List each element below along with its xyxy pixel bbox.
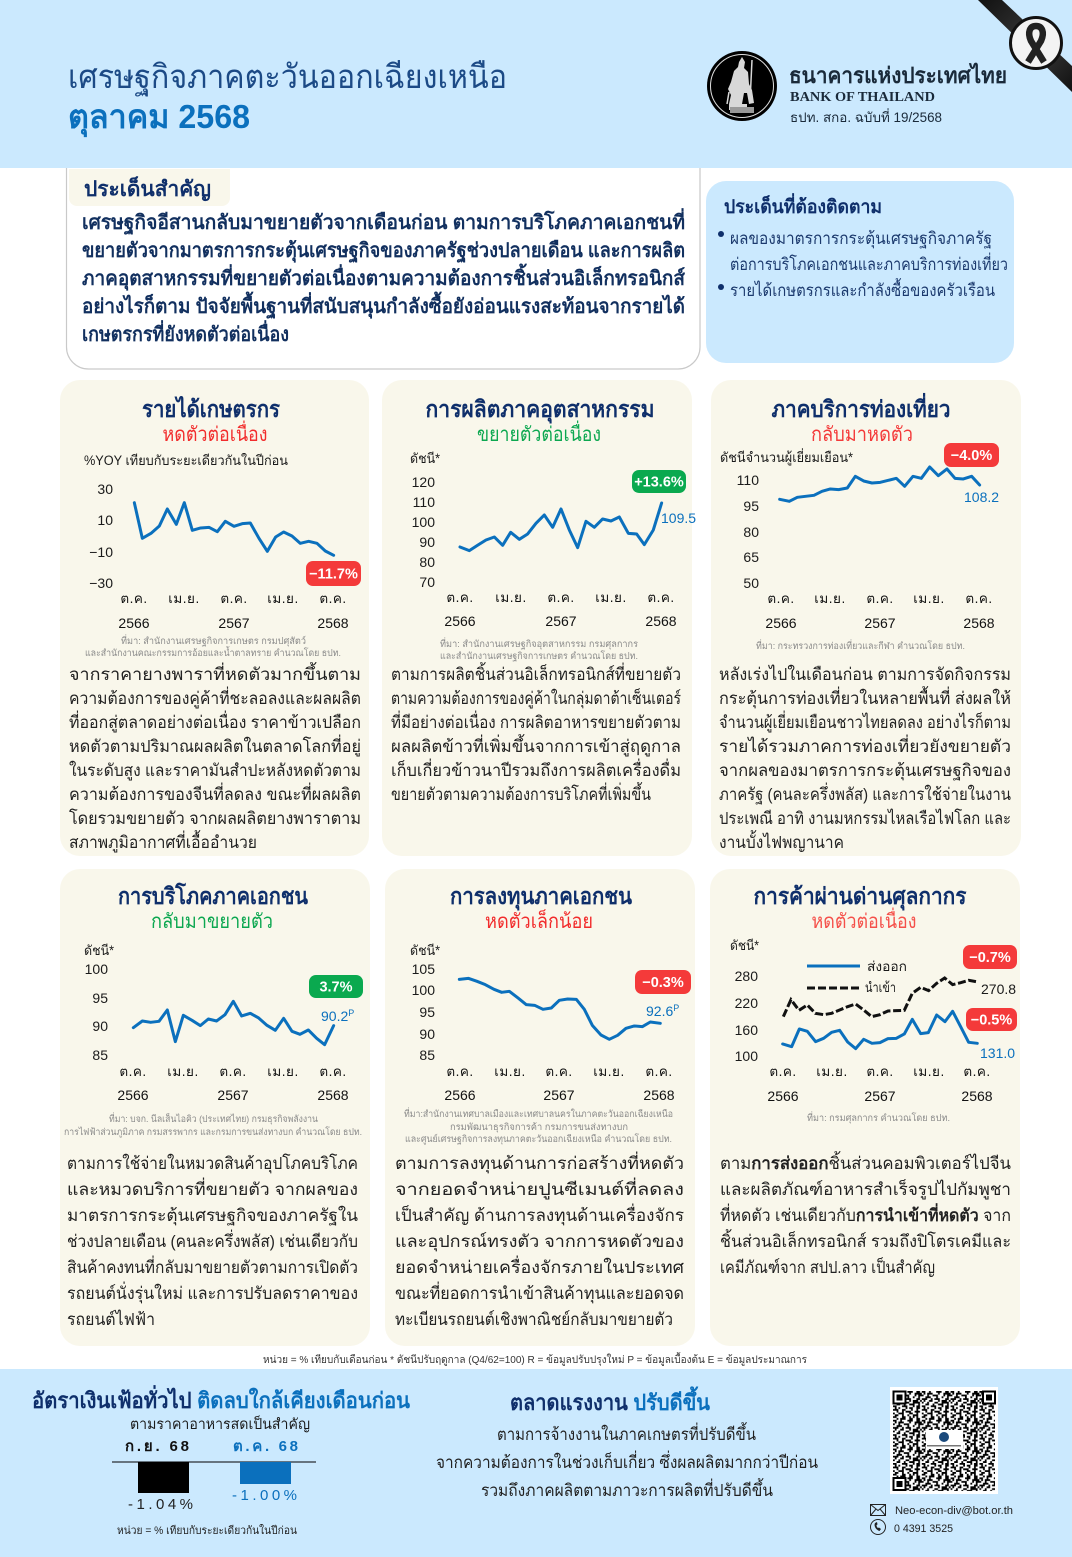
heading: กลับมาหดตัว	[811, 424, 913, 446]
heading: labour market: ตลาดแรงงาน ปรับดีขึ้น	[510, 1386, 710, 1415]
line chart: tourism: ต.ค.	[767, 591, 795, 606]
labour market text: ตามการจ้างงานในภาคเกษตรที่ปรับดีขึ้น	[497, 1422, 756, 1444]
source: ที่มา: กระทรวงการท่องเที่ยวและกีฬา คำนวณโดย ธปท.	[756, 639, 965, 652]
body text: ภาครัฐ (คนละครึ่งพลัส) และการใช้จ่ายในงาน	[719, 782, 1011, 805]
body text: ที่ออกสู่ตลาดอย่างต่อเนื่อง ราคาข้าวเปลือก	[69, 710, 361, 733]
body text	[67, 1153, 358, 1329]
legend: ส่งออก	[867, 959, 907, 974]
panel: tourism services	[711, 380, 1021, 856]
key points text: อย่างไรก็ตาม ปัจจัยพื้นฐานที่สนับสนุนกำลังซื้อยังอ่อนแรงสะท้อนจากรายได้	[82, 291, 685, 320]
body text: ขณะที่ยอดการนำเข้าสินค้าทุนและยอดจด	[395, 1281, 684, 1304]
icon: mourning ribbon	[978, 0, 1072, 92]
body text: รถยนต์ไฟฟ้า	[67, 1309, 155, 1329]
body text: ทะเบียนรถยนต์เชิงพาณิชย์กลับมาขยายตัว	[395, 1310, 673, 1329]
line chart: tourism: ต.ค.	[965, 591, 993, 606]
body text: ที่มีอย่างต่อเนื่อง การผลิตอาหารขยายตัวตาม	[391, 710, 681, 732]
line chart: private consumption: ต.ค.	[319, 1064, 347, 1079]
contact: phone	[870, 1520, 953, 1535]
line chart: private consumption: 2566	[117, 1087, 149, 1103]
line chart: customs trade: 2567	[864, 1088, 896, 1104]
body text: และหมวดบริการที่ขยายตัว จากผลของ	[67, 1177, 358, 1199]
line chart: private consumption: 2568	[317, 1087, 349, 1103]
footer band	[0, 1369, 1072, 1557]
panel: private investment	[385, 869, 695, 1346]
body text: หลังเร่งไปในเดือนก่อน ตามการจัดกิจกรรม	[719, 664, 1011, 684]
heading: things to watch: ประเด็นที่ต้องติดตาม	[724, 193, 882, 218]
badge	[632, 470, 686, 493]
heading: การลงทุนภาคเอกชน	[450, 883, 632, 911]
line chart: tourism: 65	[743, 549, 759, 565]
line chart: private investment: ต.ค.	[545, 1064, 573, 1079]
key points text: ขยายตัวจากมาตรการกระตุ้นเศรษฐกิจของภาครัฐช่วงปลายเดือน และการผลิต	[82, 239, 685, 264]
line chart: farm income: เม.ย.	[168, 591, 200, 606]
body text: และอุปกรณ์ทรงตัว จากการหดตัวของ	[395, 1232, 684, 1252]
line chart: industrial production: ต.ค.	[446, 590, 474, 605]
heading	[450, 883, 632, 933]
labour market text: จากความต้องการในช่วงเก็บเกี่ยว ซึ่งผลผลิตมากกว่าปีก่อน	[436, 1450, 818, 1472]
line chart: private consumption: ต.ค.	[119, 1064, 147, 1079]
heading: การผลิตภาคอุตสาหกรรม	[426, 396, 654, 424]
panel: industrial production	[382, 380, 696, 856]
QR code	[890, 1387, 998, 1494]
body text: ในระดับสูง และราคามันสำปะหลังหดตัวตาม	[69, 760, 361, 781]
source	[440, 637, 638, 662]
body text: ตามการผลิตชิ้นส่วนอิเล็กทรอนิกส์ที่ขยายตัว	[391, 662, 681, 684]
body text: โดยรวมขยายตัว จากผลผลิตยางพาราตาม	[69, 808, 361, 828]
line chart: private consumption	[84, 943, 363, 1103]
heading	[142, 395, 281, 446]
line chart: tourism	[720, 443, 999, 631]
badge: imports	[963, 945, 1017, 969]
legend	[807, 959, 907, 995]
line chart: private consumption: ดัชนี*	[84, 943, 115, 958]
line chart: industrial production: ดัชนี*	[410, 451, 441, 466]
body text: รายได้รวมภาคการท่องเที่ยวยังขยายตัว	[719, 734, 1011, 756]
line chart: industrial production: ต.ค.	[547, 590, 575, 605]
line chart: customs trade: ต.ค.	[866, 1064, 894, 1079]
line chart: customs trade: 2568	[961, 1088, 993, 1104]
bar chart: inflation: ต.ค. 68	[233, 1438, 298, 1455]
line chart: farm income	[84, 452, 361, 631]
body text	[395, 1151, 684, 1329]
line chart: private investment: 2566	[444, 1087, 476, 1103]
value: exports: 131.0	[980, 1045, 1015, 1061]
source: ที่มา: สำนักงานเศรษฐกิจการเกษตร กรมปศุสัตว์	[121, 634, 306, 647]
key points text: เกษตรกรที่ยังหดตัวต่อเนื่อง	[82, 319, 289, 346]
bar chart: inflation	[112, 1438, 316, 1513]
line chart: private investment: 85	[419, 1047, 435, 1063]
contact: phone: 0 4391 3525	[894, 1523, 953, 1535]
line chart: industrial production: 120	[412, 474, 435, 490]
body text	[391, 662, 681, 804]
line chart: private consumption: 85	[92, 1047, 108, 1063]
source: การไฟฟ้าส่วนภูมิภาค กรมสรรพากร และกรมการขนส่งทางบก คำนวณโดย ธปท.	[64, 1126, 362, 1138]
value: 109.5	[661, 510, 696, 526]
line chart: private consumption: 95	[92, 990, 108, 1006]
bank name: ธปท. สกอ. ฉบับที่ 19/2568	[790, 108, 942, 125]
watch list: ผลของมาตรการกระตุ้นเศรษฐกิจภาครัฐ	[730, 229, 992, 249]
body text: จากยอดจำหน่ายปูนซีเมนต์ที่ลดลง	[395, 1177, 684, 1200]
badge	[309, 975, 363, 998]
line chart: private investment: เม.ย.	[593, 1064, 625, 1079]
heading	[772, 392, 950, 446]
body text: และผลิตภัณฑ์อาหารสำเร็จรูปไปกัมพูชา	[720, 1178, 1011, 1200]
panel: farm income	[60, 380, 369, 856]
line chart: private investment: 95	[419, 1004, 435, 1020]
line chart: private consumption: เม.ย.	[167, 1064, 199, 1079]
body text: จากราคายางพาราที่หดตัวมากขึ้นตาม	[69, 662, 361, 684]
line chart: industrial production: 2567	[545, 613, 577, 629]
line chart: private investment	[410, 943, 691, 1103]
badge: +13.6%	[634, 474, 684, 490]
line chart: industrial production: ต.ค.	[647, 590, 675, 605]
legend: นำเข้า	[865, 980, 896, 995]
badge: imports: −0.7%	[969, 950, 1011, 966]
title: ตุลาคม 2568	[68, 98, 250, 138]
source: ที่มา: กรมศุลกากร คำนวณโดย ธปท.	[807, 1111, 950, 1124]
line chart: tourism: เม.ย.	[913, 591, 945, 606]
panel: inflation	[32, 1384, 410, 1537]
body text: ผลผลิตข้าวที่เพิ่มขึ้นจากการเข้าสู่ฤดูกาล	[391, 734, 681, 757]
header band	[0, 0, 1072, 168]
panel: private consumption	[60, 869, 370, 1346]
value: 90.2	[321, 1008, 348, 1024]
line chart: farm income: 2568	[317, 615, 349, 631]
bank name: ธนาคารแห่งประเทศไทย	[789, 62, 1007, 88]
bank name: BANK OF THAILAND	[790, 90, 935, 105]
line chart: customs trade: เม.ย.	[816, 1064, 848, 1079]
body text: จำนวนผู้เยี่ยมเยือนชาวไทยลดลง อย่างไรก็ตาม	[719, 710, 1011, 733]
line chart: private investment: ดัชนี*	[410, 943, 441, 958]
badge: −11.7%	[309, 566, 358, 582]
body text: ที่หดตัว เช่นเดียวกับการนำเข้าที่หดตัว จาก	[720, 1203, 1011, 1225]
badge	[306, 561, 361, 586]
line chart: private investment: 105	[412, 961, 435, 977]
body text: สภาพภูมิอากาศที่เอื้ออำนวย	[69, 830, 257, 853]
body text	[720, 1151, 1011, 1277]
source: และสำนักงานคณะกรรมการอ้อยและน้ำตาลทราย คำนวณโดย ธปท.	[85, 646, 341, 659]
body text: มาตรการกระตุ้นเศรษฐกิจของภาครัฐใน	[67, 1205, 358, 1226]
line chart: customs trade	[730, 938, 1017, 1104]
line chart: private investment: 2567	[543, 1087, 575, 1103]
badge: −4.0%	[951, 448, 992, 464]
line chart: customs trade: 220	[735, 995, 758, 1011]
subheading: ตามราคาอาหารสดเป็นสำคัญ	[130, 1414, 310, 1433]
body text: กระตุ้นการท่องเที่ยวในหลายพื้นที่ ส่งผลให้	[719, 686, 1011, 709]
line chart: farm income: ต.ค.	[120, 591, 148, 606]
body text: ชิ้นส่วนอิเล็กทรอนิกส์ รวมถึงปิโตรเคมีและ	[720, 1229, 1011, 1251]
line chart: farm income: 2566	[118, 615, 150, 631]
body text: ช่วงปลายเดือน (คนละครึ่งพลัส) เช่นเดียวกับ	[67, 1229, 358, 1251]
line chart: private investment: เม.ย.	[494, 1064, 526, 1079]
line chart: farm income: −30	[89, 575, 113, 591]
line chart: customs trade: ต.ค.	[769, 1064, 797, 1079]
line chart: tourism: 50	[743, 575, 759, 591]
value: imports: 270.8	[981, 981, 1016, 997]
body text: ประเพณี อาทิ งานมหกรรมไหลเรือไฟโลก และ	[719, 808, 1011, 828]
line chart: tourism: ดัชนีจำนวนผู้เยี่ยมเยือน*	[720, 448, 854, 466]
bar chart: inflation: -1.00%	[232, 1487, 297, 1504]
body text: ความต้องการของคู่ค้าที่ชะลอลงและผลผลิต	[69, 686, 361, 709]
heading: กลับมาขยายตัว	[151, 911, 273, 933]
panel: labour market	[436, 1386, 818, 1500]
heading: รายได้เกษตรกร	[142, 395, 281, 422]
line chart: customs trade: ต.ค.	[963, 1064, 991, 1079]
line chart: farm income: ต.ค.	[319, 591, 347, 606]
value: 92.6	[646, 1003, 673, 1019]
line chart: industrial production: 80	[419, 554, 435, 570]
panel: customs trade	[710, 869, 1020, 1346]
line chart: industrial production: 90	[419, 534, 435, 550]
source: ที่มา: บจก. นีลเส็นไอคิว (ประเทศไทย) กรมธุรกิจพลังงาน	[109, 1112, 318, 1125]
line chart: industrial production	[410, 451, 696, 629]
line chart: private consumption: 2567	[217, 1087, 249, 1103]
body text: หดตัวตามปริมาณผลผลิตในตลาดโลกที่อยู่	[69, 734, 361, 757]
line chart: industrial production: เม.ย.	[595, 590, 627, 605]
body text: ตามการลงทุนด้านการก่อสร้างที่หดตัว	[395, 1151, 684, 1174]
line chart: tourism: 95	[743, 498, 759, 514]
line chart: industrial production: 100	[412, 514, 435, 530]
value: P	[673, 1003, 679, 1013]
icon: bank of thailand seal	[707, 51, 777, 121]
line chart: private investment: 100	[412, 982, 435, 998]
line chart: industrial production: 70	[419, 574, 435, 590]
line chart: customs trade: เม.ย.	[913, 1064, 945, 1079]
heading	[426, 396, 654, 446]
heading	[118, 882, 308, 933]
line chart: customs trade: 100	[735, 1048, 758, 1064]
line chart: private investment: ต.ค.	[645, 1064, 673, 1079]
line chart: farm income: ต.ค.	[220, 591, 248, 606]
body text: สินค้าคงทนที่กลับมาขยายตัวตามการเปิดตัว	[67, 1255, 358, 1277]
heading	[754, 883, 967, 933]
key points text: เศรษฐกิจอีสานกลับมาขยายตัวจากเดือนก่อน ตามการบริโภคภาคเอกชนที่	[82, 207, 685, 236]
source: กรมพัฒนาธุรกิจการค้า กรมการขนส่งทางบก	[450, 1122, 628, 1133]
source: ที่มา: สำนักงานเศรษฐกิจอุตสาหกรรม กรมศุลกากร	[440, 637, 638, 650]
body text: จากผลของมาตรการกระตุ้นเศรษฐกิจของ	[719, 761, 1011, 781]
footnote: หน่วย = % เทียบกับเดือนก่อน * ดัชนีปรับฤดูกาล (Q4/62=100) R = ข้อมูลปรับปรุงใหม่ P = ข้อมูลเบื้องต้น E = ข้อมูลประมาณการ	[263, 1352, 807, 1366]
line chart: farm income: 30	[97, 481, 113, 497]
line chart: tourism: 80	[743, 524, 759, 540]
heading: หดตัวต่อเนื่อง	[812, 907, 916, 933]
badge: exports: −0.5%	[971, 1012, 1012, 1028]
heading chip: key points: ประเด็นสำคัญ	[84, 175, 211, 202]
body text	[719, 664, 1011, 852]
line chart: industrial production: เม.ย.	[495, 590, 527, 605]
watch list: รายได้เกษตรกรและกำลังซื้อของครัวเรือน	[730, 278, 995, 300]
body text: ความต้องการของจีนที่ลดลง ขณะที่ผลผลิต	[69, 782, 361, 804]
watch list: ต่อการบริโภคเอกชนและภาคบริการท่องเที่ยว	[730, 252, 1008, 274]
body text	[69, 662, 361, 853]
body text: ตามความต้องการของคู่ค้าในกลุ่มดาต้าเซ็นเตอร์	[391, 687, 681, 709]
heading: การค้าผ่านด่านศุลกากร	[754, 883, 967, 911]
body text: งานบั้งไฟพญานาค	[719, 830, 844, 852]
heading: ภาคบริการท่องเที่ยว	[772, 392, 950, 422]
heading: inflation: อัตราเงินเฟ้อทั่วไป ติดลบใกล้เคียงเดือนก่อน	[32, 1384, 410, 1413]
line chart: tourism: 110	[737, 472, 759, 488]
badge: exports	[966, 1008, 1017, 1031]
panel: things to watch	[706, 181, 1014, 363]
line chart: customs trade: 2566	[767, 1088, 799, 1104]
line chart: farm income: %YOY เทียบกับระยะเดียวกันในปีก่อน	[84, 452, 288, 468]
badge: −0.3%	[642, 975, 684, 991]
line chart: tourism: 2566	[765, 615, 797, 631]
line chart: farm income: เม.ย.	[267, 591, 299, 606]
labour market text	[436, 1422, 818, 1500]
line chart: private investment: 2568	[643, 1087, 675, 1103]
line chart: private consumption: เม.ย.	[267, 1064, 299, 1079]
contact: email: Neo-econ-div@bot.or.th	[895, 1505, 1013, 1517]
heading: หดตัวต่อเนื่อง	[162, 420, 268, 446]
labour market text: รวมถึงภาคผลิตตามภาวะการผลิตที่ปรับดีขึ้น	[481, 1478, 773, 1500]
line chart: farm income: −10	[89, 544, 113, 560]
source	[64, 1112, 362, 1138]
line chart: industrial production: 2568	[645, 613, 677, 629]
title: เศรษฐกิจภาคตะวันออกเฉียงเหนือ	[68, 58, 507, 97]
line chart: customs trade: 160	[735, 1022, 758, 1038]
value: P	[348, 1008, 354, 1018]
key points text: ภาคอุตสาหกรรมที่ขยายตัวต่อเนื่องตามความต้องการชิ้นส่วนอิเล็กทรอนิกส์	[82, 263, 686, 291]
source	[85, 634, 341, 659]
bank name	[789, 62, 1007, 125]
body text: ยอดจำหน่ายเครื่องจักรภายในประเทศ	[395, 1255, 684, 1277]
line chart: tourism: 2567	[864, 615, 896, 631]
badge: 3.7%	[319, 980, 353, 996]
line chart: industrial production: 2566	[444, 613, 476, 629]
line chart: customs trade: 280	[735, 968, 758, 984]
badge	[944, 443, 999, 467]
badge	[635, 970, 691, 994]
bar chart: inflation: -1.04%	[128, 1496, 193, 1513]
line chart: private consumption: 90	[92, 1018, 108, 1034]
line chart: tourism: ต.ค.	[866, 591, 894, 606]
line chart: private investment: ต.ค.	[446, 1064, 474, 1079]
line chart: tourism: เม.ย.	[814, 591, 846, 606]
line chart: tourism: 2568	[963, 615, 995, 631]
heading chip: key points	[69, 169, 230, 206]
watch list	[718, 229, 1008, 300]
body text: ขยายตัวตามความต้องการบริโภคที่เพิ่มขึ้น	[391, 782, 651, 804]
heading: ขยายตัวต่อเนื่อง	[477, 420, 601, 446]
line chart: farm income: 2567	[218, 615, 250, 631]
heading: การบริโภคภาคเอกชน	[118, 882, 308, 909]
body text: เก็บเกี่ยวข้าวนาปีรวมถึงการผลิตเครื่องดื่ม	[391, 758, 681, 780]
line chart: private investment: 90	[419, 1026, 435, 1042]
line chart: industrial production: 110	[413, 494, 435, 510]
body text: เคมีภัณฑ์จาก สปป.ลาว เป็นสำคัญ	[720, 1256, 935, 1277]
source: และศูนย์เศรษฐกิจการลงทุนภาคตะวันออกเฉียงเหนือ คำนวณโดย ธปท.	[405, 1133, 672, 1145]
line chart: farm income: 10	[97, 512, 113, 528]
line chart: private consumption: 100	[85, 961, 108, 977]
heading: หดตัวเล็กน้อย	[485, 908, 593, 933]
body text: ตามการส่งออกชิ้นส่วนคอมพิวเตอร์ไปจีน	[720, 1151, 1011, 1173]
source: ที่มา:สำนักงานเทศบาลเมืองและเทศบาลนครในภาคตะวันออกเฉียงเหนือ	[404, 1107, 673, 1120]
line chart: customs trade: ดัชนี*	[730, 938, 760, 953]
bar chart: inflation: ก.ย. 68	[125, 1438, 189, 1455]
source: และสำนักงานเศรษฐกิจการเกษตร คำนวณโดย ธปท.	[440, 650, 638, 662]
body text: ตามการใช้จ่ายในหมวดสินค้าอุปโภคบริโภค	[67, 1153, 358, 1174]
key points text	[82, 207, 686, 346]
line chart: private consumption: ต.ค.	[219, 1064, 247, 1079]
unit note: หน่วย = % เทียบกับระยะเดียวกันในปีก่อน	[117, 1524, 297, 1537]
body text: รถยนต์นั่งรุ่นใหม่ และการปรับลดราคาของ	[67, 1281, 358, 1304]
source	[404, 1107, 673, 1145]
panel: key points	[66, 168, 700, 369]
value: 108.2	[964, 489, 999, 505]
body text: เป็นสำคัญ ด้านการลงทุนด้านเครื่องจักร	[395, 1203, 684, 1226]
title	[68, 58, 507, 138]
